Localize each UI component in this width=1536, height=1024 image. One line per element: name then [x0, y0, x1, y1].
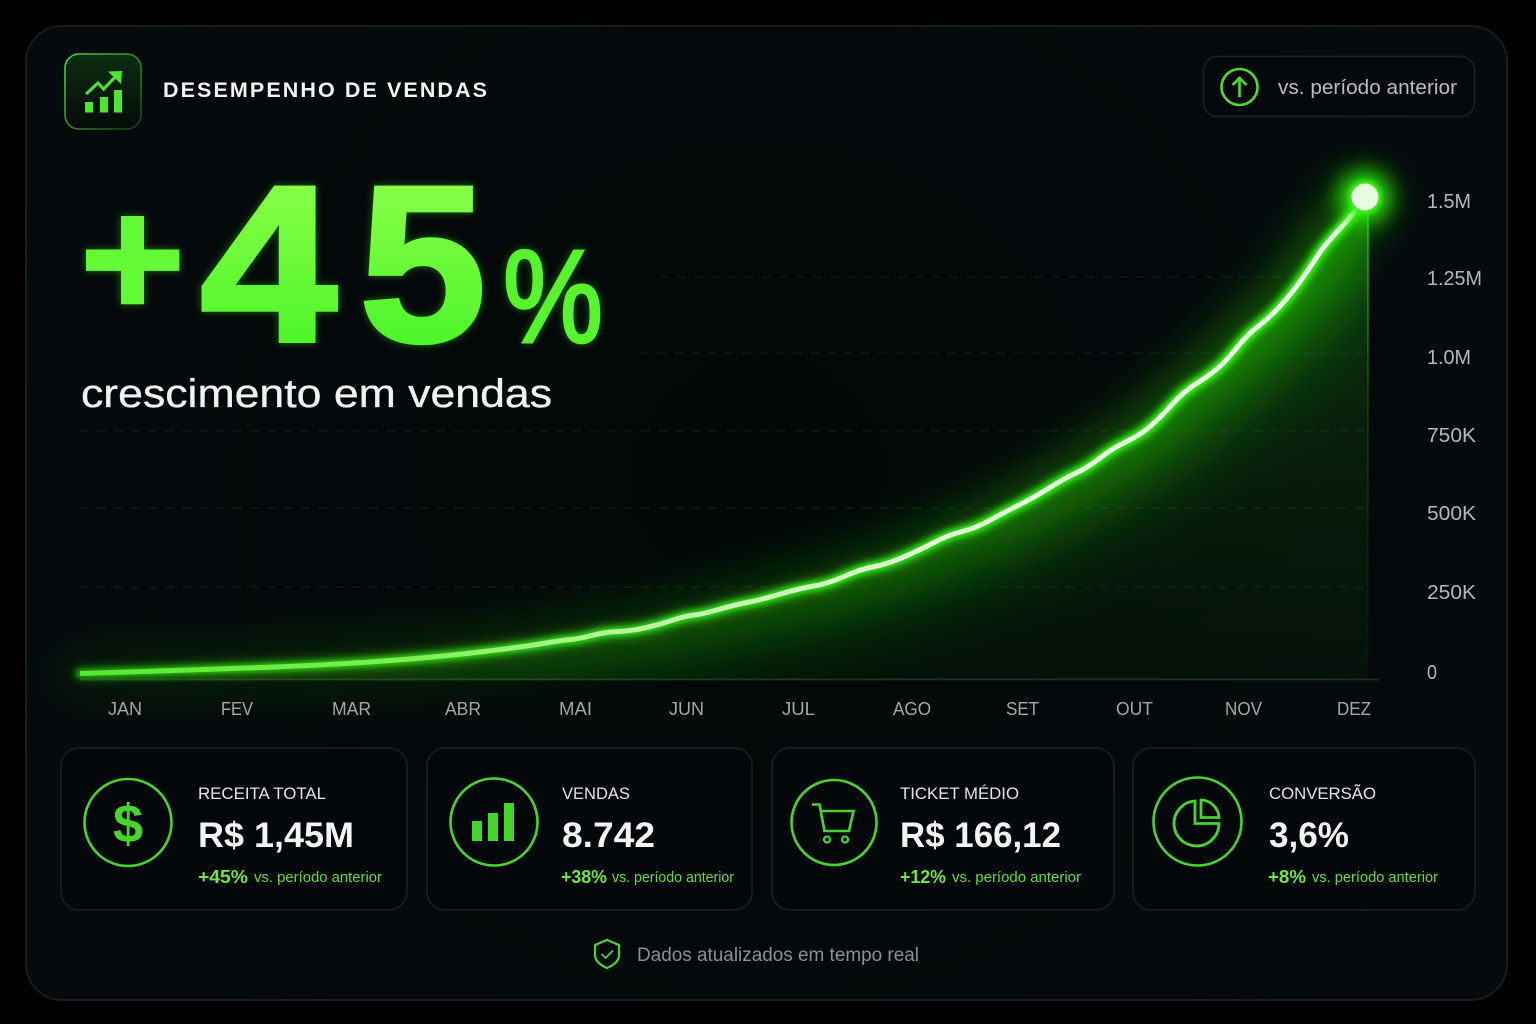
x axis months: ABR — [445, 699, 481, 719]
icon: bars — [450, 778, 538, 866]
metric text: +8% — [1268, 866, 1306, 887]
metric text: +38% — [561, 866, 607, 887]
headline: +45%: + — [80, 164, 185, 352]
x axis months: AGO — [893, 699, 931, 719]
metric text: 8.742 — [562, 816, 655, 855]
metric text — [1268, 783, 1438, 887]
metric text: R$ 1,45M — [198, 816, 354, 855]
x axis months: MAI — [559, 699, 592, 719]
y axis labels: 0 — [1427, 662, 1437, 684]
panel: conversao — [1133, 748, 1475, 910]
metric text: vs. período anterior — [1312, 870, 1438, 886]
headline: +45%: 5 — [359, 139, 486, 388]
x axis months — [108, 699, 1371, 719]
badge: comparison period — [1204, 56, 1474, 116]
x axis months: MAR — [332, 699, 371, 719]
icon: header trend chart — [65, 54, 141, 129]
icon: cart — [792, 780, 876, 865]
y axis labels: 1.0M — [1427, 347, 1471, 369]
metric text: +45% — [198, 866, 248, 887]
x axis months: SET — [1006, 699, 1039, 719]
chart vertical marker — [1367, 197, 1369, 680]
metric text: CONVERSÃO — [1269, 783, 1376, 803]
headline: +45%: 4 — [200, 139, 337, 388]
x axis months: OUT — [1116, 699, 1153, 719]
metric text: vs. período anterior — [254, 870, 382, 886]
x axis months: NOV — [1225, 699, 1262, 719]
metric text — [900, 784, 1081, 887]
x axis months: JUN — [669, 699, 704, 719]
panel: vendas — [427, 748, 752, 910]
metric text — [561, 785, 734, 887]
metric text — [198, 785, 382, 887]
panel: receita total — [61, 748, 407, 910]
subtitle: crescimento em vendas — [81, 372, 552, 416]
chart area fill — [80, 197, 1368, 680]
icon: dollar: $ — [113, 794, 143, 854]
y axis labels: 750K — [1427, 425, 1477, 447]
footer note — [595, 940, 919, 968]
x axis months: JAN — [108, 699, 142, 719]
icon: shield — [595, 940, 619, 968]
metric text: VENDAS — [562, 785, 630, 803]
metric text: vs. período anterior — [612, 870, 734, 886]
chart: sales growth — [80, 171, 1482, 719]
line glow — [80, 197, 1365, 674]
y axis labels — [1427, 191, 1482, 684]
x axis months: DEZ — [1337, 699, 1371, 719]
metric text: vs. período anterior — [952, 870, 1081, 886]
icon: dollar — [84, 779, 172, 866]
metric text: +12% — [900, 866, 946, 887]
x axis months: JUL — [782, 699, 815, 719]
line core — [80, 197, 1365, 674]
metric text: R$ 166,12 — [900, 816, 1061, 855]
y axis labels: 500K — [1427, 503, 1477, 525]
headline: +45%: % — [503, 223, 603, 370]
headline: +45% — [80, 139, 603, 388]
panel: ticket medio — [772, 748, 1114, 910]
footer note: Dados atualizados em tempo real — [637, 945, 919, 966]
y axis labels: 250K — [1427, 582, 1477, 604]
metric text: RECEITA TOTAL — [198, 785, 326, 803]
end point dot — [1339, 171, 1391, 223]
x axis months: FEV — [221, 699, 253, 719]
icon: pie chart — [1154, 778, 1242, 866]
y axis labels: 1.25M — [1427, 268, 1482, 290]
metric text: TICKET MÉDIO — [900, 784, 1019, 803]
metric text: 3,6% — [1269, 816, 1349, 855]
title: DESEMPENHO DE VENDAS — [163, 78, 487, 102]
badge: comparison period: vs. período anterior — [1278, 77, 1457, 99]
y axis labels: 1.5M — [1427, 191, 1471, 213]
